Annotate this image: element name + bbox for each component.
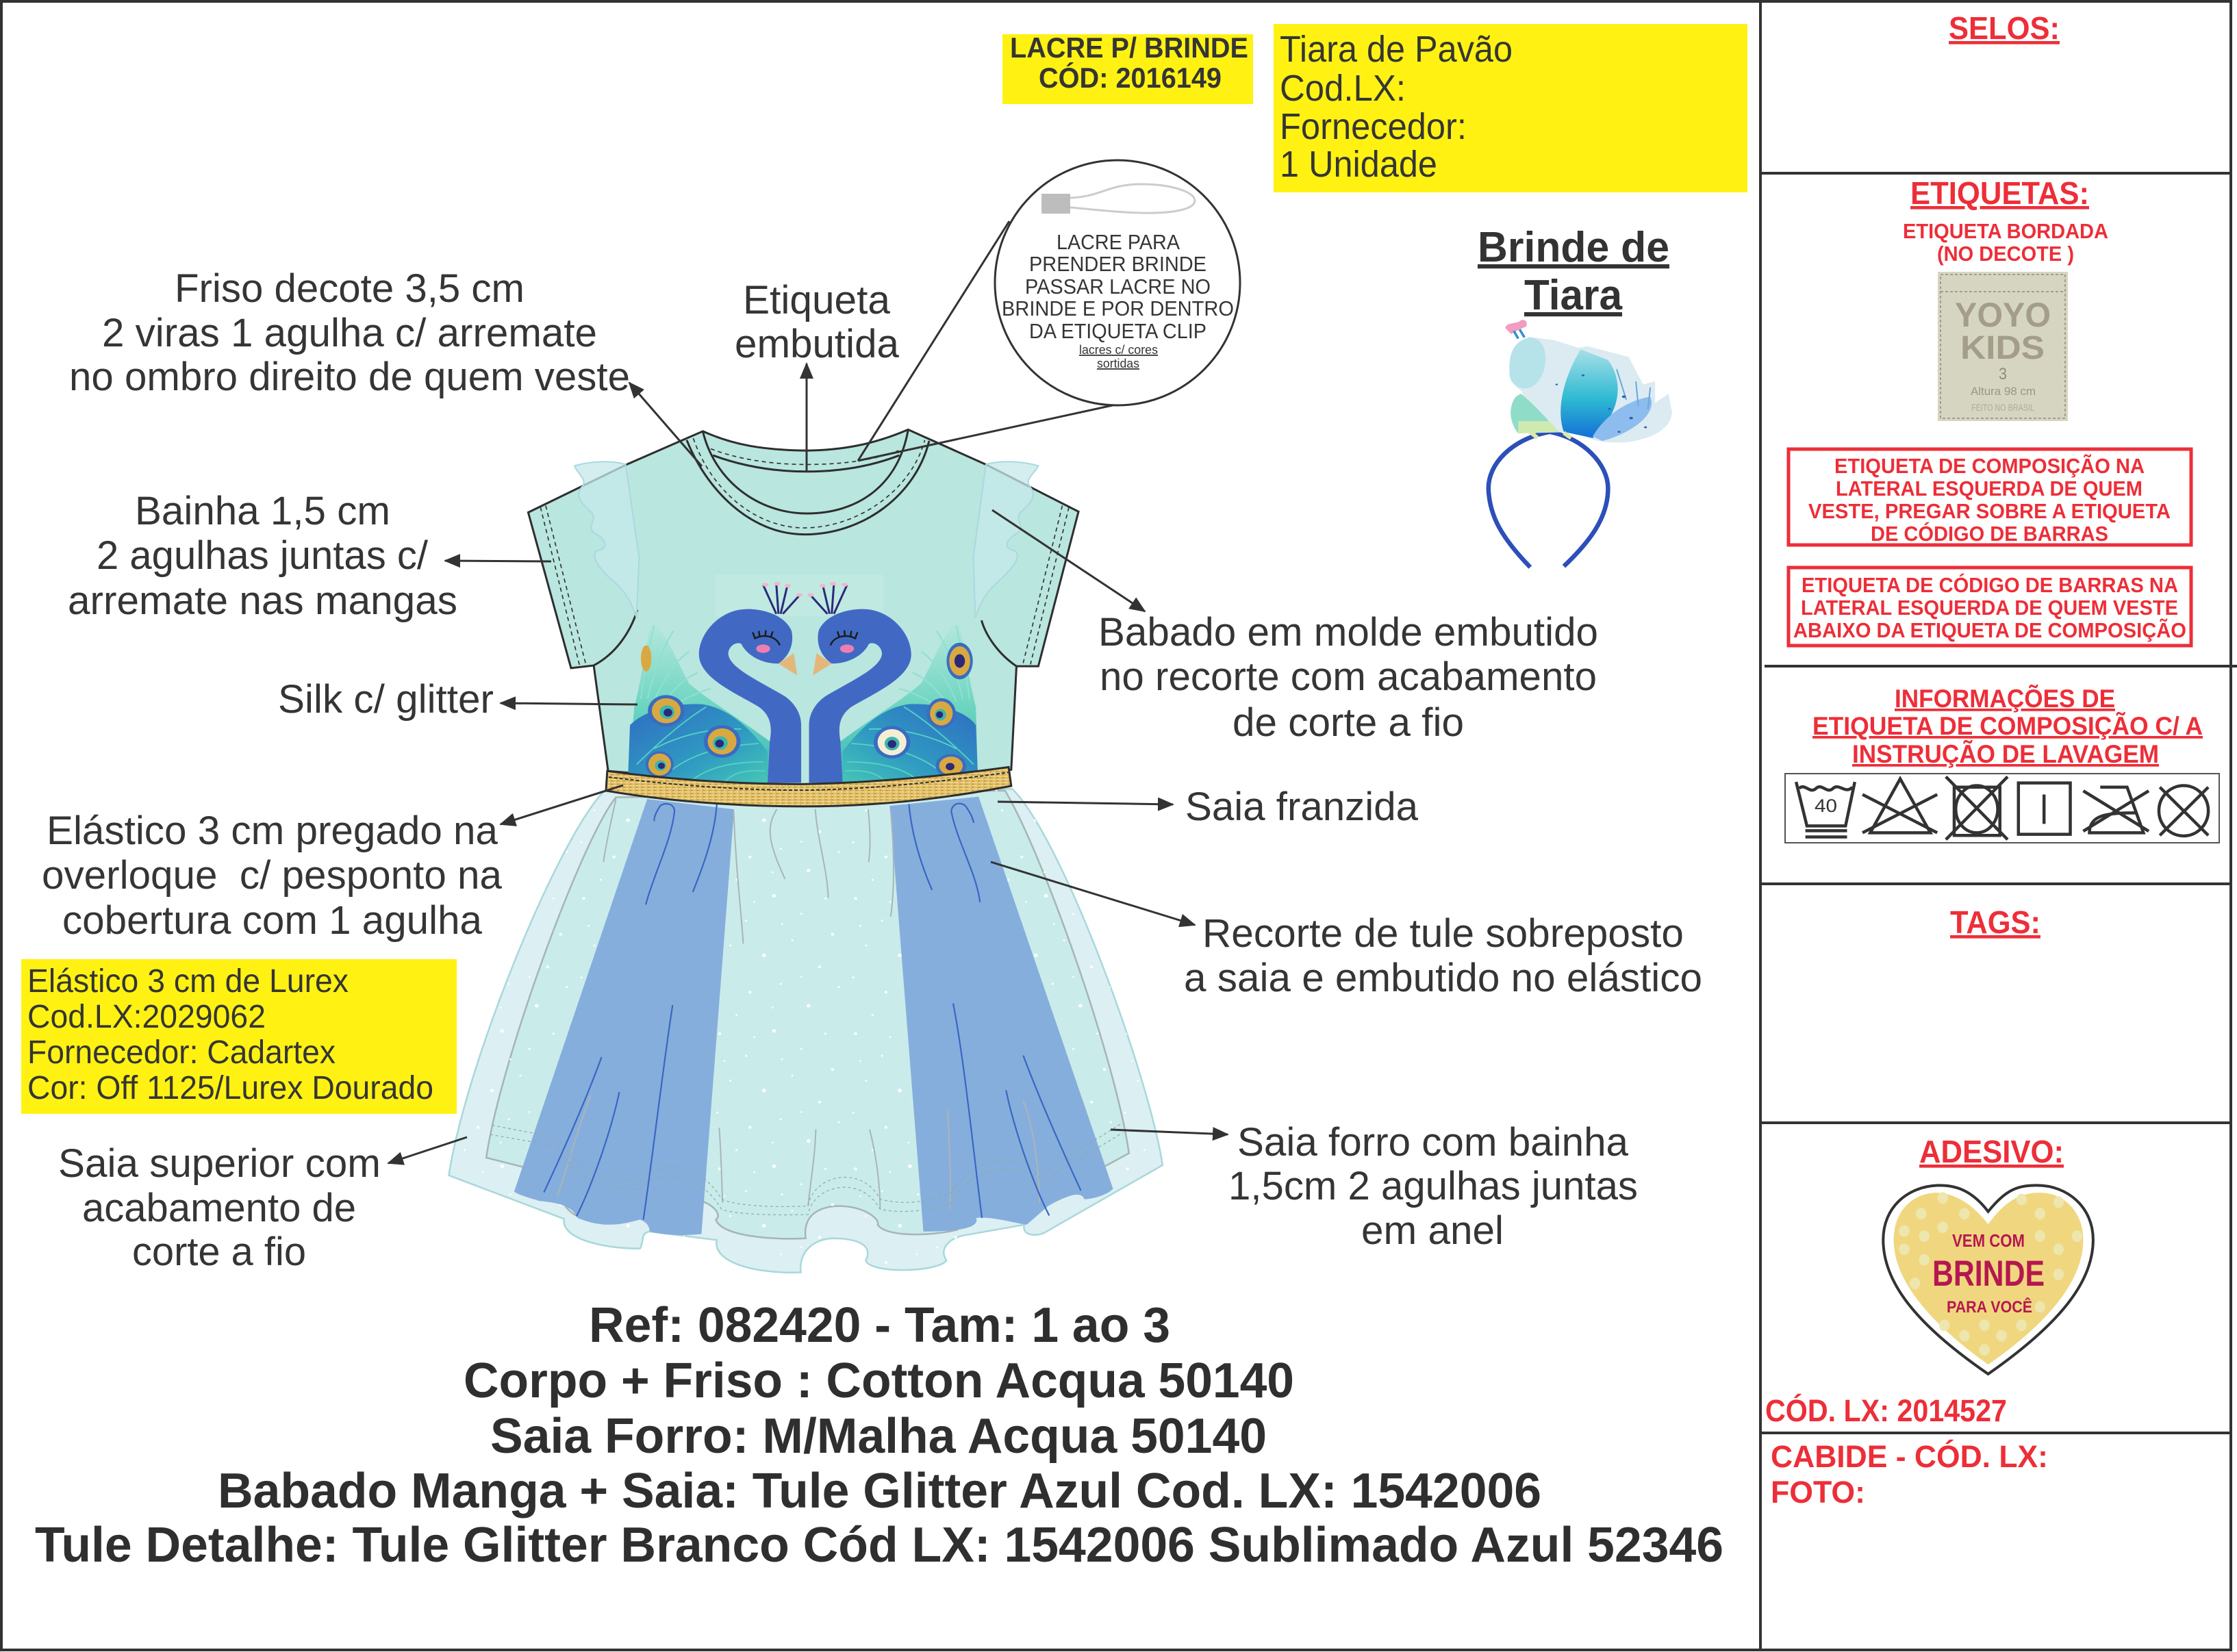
callout labels: no ombro direito de quem veste [69, 355, 630, 399]
callout labels: overloque c/ pesponto na [42, 853, 503, 898]
callout labels: 2 viras 1 agulha c/ arremate [102, 311, 597, 355]
skirt [448, 789, 1163, 1273]
silk: left peacock [628, 582, 802, 783]
hem stitching [490, 1124, 1123, 1215]
note box: composição [1789, 449, 2191, 546]
icon: heart sticker: BRINDE [1932, 1254, 2045, 1294]
silk: right peacock [808, 582, 978, 783]
callout labels: em anel [1361, 1208, 1504, 1253]
callout labels [42, 266, 1702, 1274]
text: etiqueta bordada: ETIQUETA BORDADA [1903, 219, 2108, 243]
callout labels: Silk c/ glitter [278, 677, 494, 722]
callout circle: lacre: LACRE PARA [1057, 230, 1180, 254]
panel: cabide [1771, 1439, 2048, 1510]
body and sleeves [528, 430, 1078, 788]
yellow note: elástico lurex [21, 959, 457, 1114]
callout circle: lacre: BRINDE E POR DENTRO [1002, 296, 1234, 320]
icon: woven label yoyo kids: FEITO NO BRASIL [1971, 402, 2034, 413]
callout labels: Saia forro com bainha [1237, 1120, 1629, 1165]
callout labels: corte a fio [132, 1230, 306, 1274]
lining skirt [486, 791, 1129, 1238]
callout labels: no recorte com acabamento [1100, 655, 1597, 699]
callout labels: 1,5cm 2 agulhas juntas [1228, 1164, 1638, 1208]
callout labels: Babado em molde embutido [1098, 610, 1598, 655]
note box: código de barras: LATERAL ESQUERDA DE QUEM VESTE [1801, 596, 2178, 620]
callout circle: lacre: DA ETIQUETA CLIP [1029, 319, 1206, 343]
yellow note: elástico lurex: Cor: Off 1125/Lurex Dourado [27, 1070, 433, 1106]
callout labels: embutida [735, 322, 900, 366]
icons: wash care symbols: 40 [1815, 796, 1837, 816]
callout circle: lacre: sortidas [1097, 357, 1139, 370]
reference and fabric specification: Babado Manga + Saia: Tule Glitter Azul Cod. LX: 1542006 [218, 1464, 1541, 1518]
glitter on tulle [448, 789, 1163, 1268]
panel: cabide: CABIDE - CÓD. LX: [1771, 1439, 2048, 1474]
note box: código de barras: ETIQUETA DE CÓDIGO DE BARRAS NA [1802, 572, 2178, 597]
callout circle: lacre [858, 160, 1240, 461]
callout labels: Bainha 1,5 cm [135, 489, 390, 533]
yellow note: lacre p/ brinde: CÓD: 2016149 [1039, 61, 1222, 94]
blue fold lines [544, 804, 1081, 1219]
note box: composição: DE CÓDIGO DE BARRAS [1871, 521, 2108, 546]
yellow note: tiara de pavão: Fornecedor: [1280, 106, 1467, 147]
callout labels: Recorte de tule sobreposto [1202, 911, 1684, 956]
outer tulle [448, 789, 1163, 1273]
callout labels: acabamento de [82, 1186, 356, 1230]
reference and fabric specification [35, 1298, 1723, 1573]
tulle blue panels [514, 799, 734, 1235]
note box: código de barras [1789, 568, 2191, 646]
callout labels: arremate nas mangas [68, 579, 457, 623]
note box: composição: LATERAL ESQUERDA DE QUEM [1836, 476, 2143, 500]
panel: tags: TAGS: [1950, 904, 2040, 940]
yellow note: tiara de pavão [1274, 24, 1747, 192]
note box: composição: ETIQUETA DE COMPOSIÇÃO NA [1834, 454, 2145, 478]
callout labels: Etiqueta [743, 278, 891, 322]
icon: heart sticker: VEM COM [1952, 1230, 2025, 1251]
reference and fabric specification: Corpo + Friso : Cotton Acqua 50140 [464, 1354, 1294, 1408]
icon: heart sticker: PARA VOCÊ [1947, 1297, 2032, 1317]
yellow note: tiara de pavão: Tiara de Pavão [1280, 29, 1513, 70]
panel: adesivo [1765, 1134, 2093, 1428]
callout labels: 2 agulhas juntas c/ [97, 533, 429, 578]
heading: informações: ETIQUETA DE COMPOSIÇÃO C/ A [1812, 711, 2203, 740]
yellow note: tiara de pavão: 1 Unidade [1280, 144, 1437, 185]
heading: informações: INSTRUÇÃO DE LAVAGEM [1852, 739, 2159, 768]
yellow note: elástico lurex: Elástico 3 cm de Lurex [27, 963, 349, 1000]
yellow note: lacre p/ brinde [1002, 31, 1253, 104]
sleeve ruffles [574, 461, 639, 618]
heading: etiquetas: ETIQUETAS: [1910, 175, 2089, 211]
callout arrows [388, 364, 1228, 1163]
callout labels: Elástico 3 cm pregado na [47, 809, 498, 853]
yellow note: elástico lurex: Fornecedor: Cadartex [27, 1034, 336, 1071]
heading: brinde de tiara: Brinde de [1478, 224, 1669, 271]
panel: informações de composição [1785, 684, 2219, 843]
reference and fabric specification: Ref: 082420 - Tam: 1 ao 3 [589, 1298, 1170, 1353]
text: etiqueta bordada [1903, 219, 2108, 266]
yellow note: tiara de pavão: Cod.LX: [1280, 68, 1406, 109]
callout labels: Saia franzida [1185, 785, 1419, 829]
heading: brinde de tiara: Tiara [1524, 272, 1622, 319]
callout circle: lacre: PRENDER BRINDE [1029, 252, 1206, 276]
icon: peacock tiara [1489, 320, 1672, 568]
callout circle: lacre: PASSAR LACRE NO [1025, 275, 1211, 298]
dress illustration [448, 430, 1163, 1273]
icon: heart sticker [1883, 1185, 2093, 1374]
print background [715, 574, 883, 616]
stitching [540, 438, 1069, 666]
reference and fabric specification: Saia Forro: M/Malha Acqua 50140 [490, 1409, 1267, 1464]
note box: composição: VESTE, PREGAR SOBRE A ETIQUETA [1808, 499, 2171, 523]
panel: selos: SELOS: [1949, 10, 2060, 46]
text: etiqueta bordada: (NO DECOTE ) [1937, 242, 2074, 266]
icon: woven label yoyo kids: YOYO [1955, 296, 2051, 334]
grey fold lines [557, 799, 1039, 1210]
panel: etiquetas [1789, 175, 2191, 646]
heading: informações [1812, 684, 2203, 768]
yellow note: lacre p/ brinde: LACRE P/ BRINDE [1010, 31, 1248, 64]
panel: cabide: FOTO: [1771, 1475, 1865, 1510]
reference and fabric specification: Tule Detalhe: Tule Glitter Branco Cód LX: 1542006 Sublimado Azul 52346 [35, 1518, 1723, 1573]
bodice [528, 430, 1078, 806]
code: adesivo: CÓD. LX: 2014527 [1765, 1393, 2007, 1428]
heading: informações: INFORMAÇÕES DE [1895, 684, 2115, 713]
icons: wash care symbols [1785, 774, 2219, 843]
icon: woven label yoyo kids: 3 [1999, 365, 2007, 383]
callout labels: cobertura com 1 agulha [62, 898, 483, 943]
icon: woven label yoyo kids: Altura 98 cm [1971, 385, 2036, 398]
heading: adesivo: ADESIVO: [1919, 1134, 2064, 1169]
icon: woven label yoyo kids: KIDS [1960, 330, 2045, 366]
callout labels: a saia e embutido no elástico [1184, 956, 1702, 1000]
callout labels: Saia superior com [58, 1141, 381, 1186]
yellow note: elástico lurex: Cod.LX:2029062 [27, 999, 266, 1035]
callout circle: lacre: lacres c/ cores [1079, 343, 1158, 357]
callout labels: Friso decote 3,5 cm [175, 266, 525, 311]
heading: brinde de tiara [1478, 224, 1669, 319]
note box: código de barras: ABAIXO DA ETIQUETA DE COMPOSIÇÃO [1793, 618, 2186, 642]
collar seams [594, 430, 1016, 666]
gold lurex elastic waistband [606, 767, 1011, 806]
callout labels: de corte a fio [1233, 700, 1464, 745]
icon: woven label yoyo kids [1938, 272, 2068, 421]
